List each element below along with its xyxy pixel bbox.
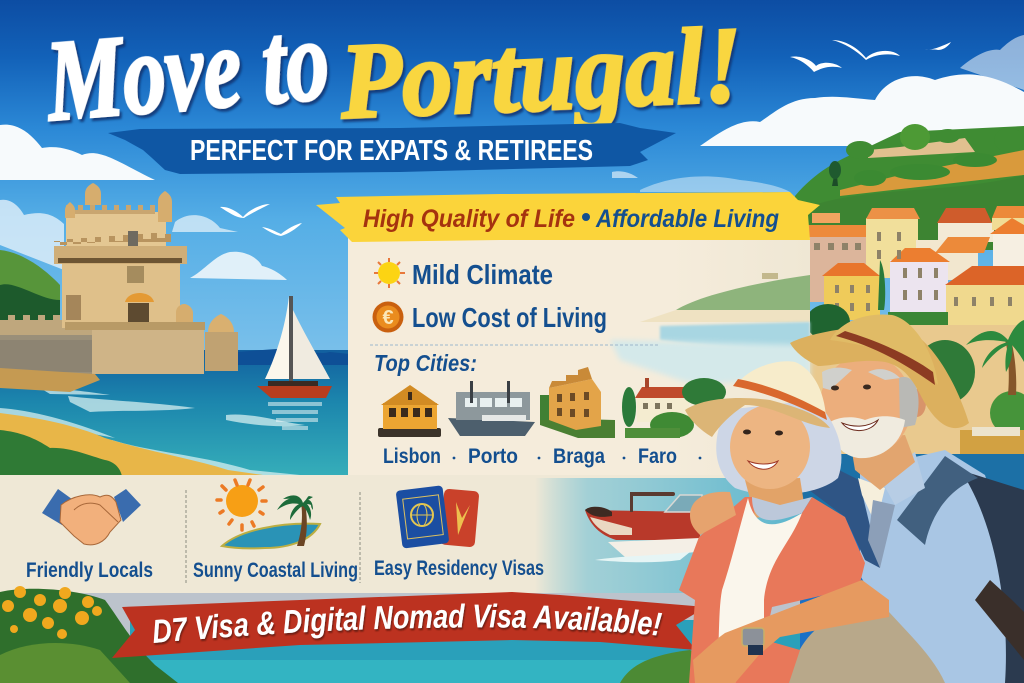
palm tree — [966, 320, 1024, 395]
birds — [220, 40, 951, 236]
rocks — [0, 368, 100, 392]
Belem tower — [0, 183, 238, 374]
icon: euro coin — [372, 302, 404, 332]
icon: Lisbon building — [378, 385, 441, 437]
info panel — [348, 238, 810, 478]
woman — [679, 361, 865, 683]
flowers and shrubs — [0, 586, 178, 683]
icon: palm — [277, 495, 313, 546]
label: easy residency visas: Easy Residency Visas — [374, 557, 544, 580]
beach — [0, 413, 270, 476]
heading: top cities: Top Cities: — [374, 350, 477, 376]
city label: Porto: Porto — [468, 445, 518, 468]
separator dot — [453, 457, 455, 459]
title: Move to Portugal — [41, 0, 745, 146]
bushes on the beach — [0, 430, 122, 476]
watercolor bay inside panel — [610, 273, 810, 384]
icon: blue passport — [396, 485, 449, 549]
text: low cost of living: Low Cost of Living — [412, 302, 607, 333]
wristwatch — [742, 628, 764, 655]
city label: Lisbon: Lisbon — [383, 445, 441, 468]
boat reflection — [268, 402, 322, 430]
icon: Porto boat — [448, 381, 535, 436]
town houses — [808, 206, 1024, 332]
sea — [0, 348, 360, 480]
banner text: D7 Visa & Digital Nomad Visa Available! — [154, 604, 664, 646]
lower coast — [0, 593, 800, 683]
text: mild climate: Mild Climate — [412, 259, 553, 290]
feature: easy residency visas — [374, 485, 544, 580]
icon: sun with rays — [217, 480, 266, 530]
lower right hillside — [780, 304, 1024, 514]
couple — [679, 314, 1024, 683]
feature: friendly locals — [26, 489, 153, 582]
clouds — [0, 35, 1024, 280]
icon: Braga building — [540, 367, 615, 438]
separator dot — [699, 457, 701, 459]
icon: handshake — [42, 489, 141, 545]
divider — [185, 490, 187, 583]
bottom features strip — [0, 475, 800, 597]
divider — [359, 492, 361, 583]
city label: Faro: Faro — [638, 445, 677, 468]
city label: Braga: Braga — [553, 445, 605, 468]
sailboat — [257, 296, 332, 398]
hilltop behind town — [795, 124, 1024, 250]
man's forearm — [693, 580, 889, 683]
subtitle text: PERFECT FOR EXPATS & RETIREES — [190, 135, 593, 167]
man's hand on shoulder — [690, 492, 736, 535]
man — [789, 314, 1024, 683]
sky background — [0, 0, 1024, 400]
ribbon text: quality of life: High Quality of Life — [363, 205, 575, 233]
label: friendly locals: Friendly Locals — [26, 559, 153, 582]
icon: Faro villa — [622, 378, 726, 438]
ribbon text: affordable living: Affordable Living — [595, 205, 779, 233]
feature: sunny coastal living — [193, 480, 358, 582]
speedboat — [585, 492, 702, 562]
ribbon bullet — [582, 213, 590, 221]
left hillside — [0, 250, 60, 325]
yellow ribbon — [316, 192, 820, 242]
icon: island — [222, 524, 320, 548]
separator dot — [538, 457, 540, 459]
subtitle ribbon — [108, 123, 676, 174]
panel divider — [370, 344, 660, 346]
icon: red passport — [440, 489, 479, 547]
icon: sun — [374, 258, 405, 288]
label: sunny coastal living: Sunny Coastal Living — [193, 559, 358, 582]
title: Portugal: Portugal! — [337, 6, 745, 142]
icon: euro coin: € — [382, 307, 394, 329]
separator dot — [623, 457, 625, 459]
red visa banner — [112, 592, 695, 658]
